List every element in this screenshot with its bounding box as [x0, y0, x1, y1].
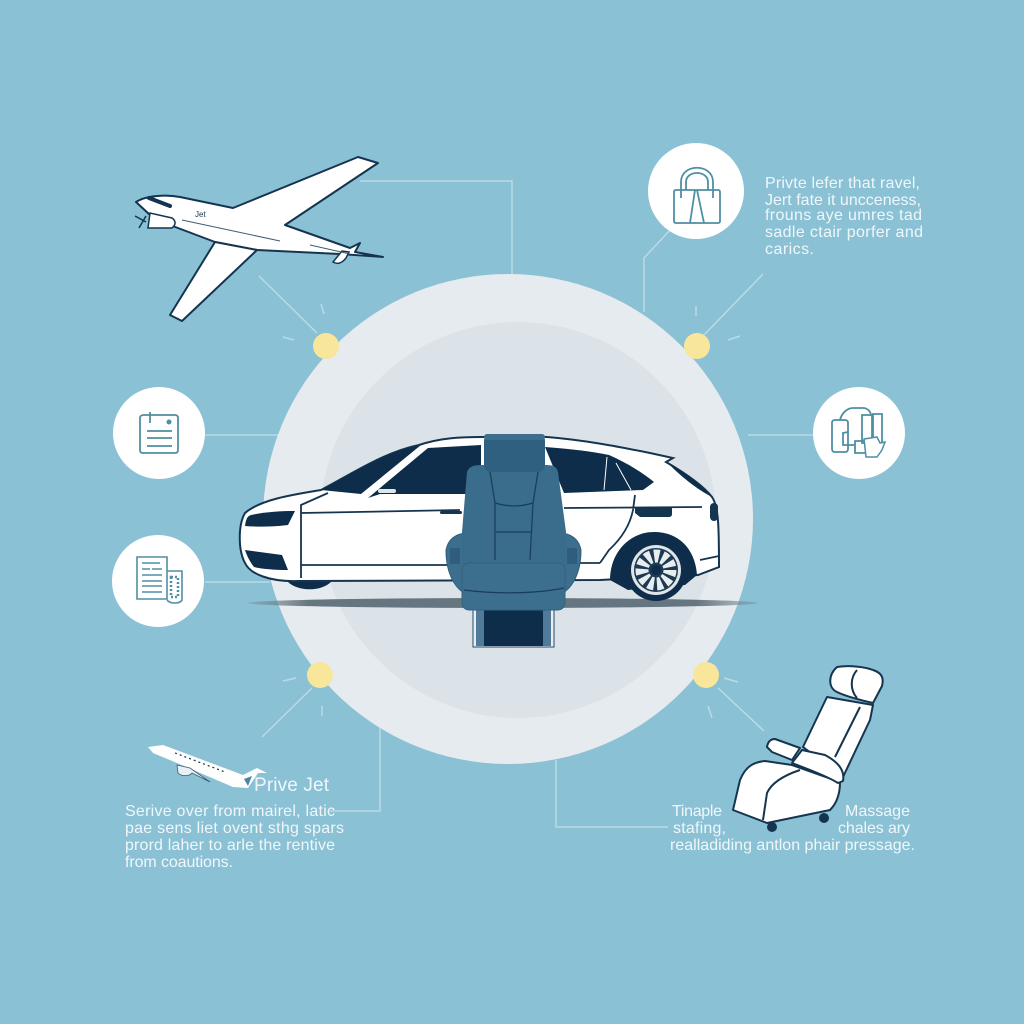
connector lines	[205, 181, 815, 827]
yellow dots	[307, 333, 719, 688]
text block: bottom right: Massage	[845, 803, 910, 820]
text block: bottom right	[670, 803, 915, 854]
text block: bottom right: Tinaple	[672, 803, 722, 820]
text block: top right: Jert fate it uncceness,	[765, 192, 921, 209]
icon: seat	[446, 434, 581, 647]
text block: bottom right: stafing,	[673, 820, 726, 837]
text block: bottom left: from coautions.	[125, 854, 233, 871]
text block: top right: carics.	[765, 241, 814, 258]
text block: top right: frouns aye umres tad	[765, 207, 922, 224]
icon: large jet: Jet	[195, 210, 206, 219]
text block: top right: sadle ctair porfer and	[765, 224, 923, 241]
text block: bottom left: pae sens liet ovent sthg spars	[125, 820, 344, 837]
text block: bottom left: Serive over from mairel, latic	[125, 803, 335, 820]
icon circle: note	[113, 387, 205, 479]
icon: car	[240, 437, 719, 590]
icon circle: document	[112, 535, 204, 627]
icon: small jet	[148, 745, 267, 788]
text block: bottom right: realladiding antlon phair pressage.	[670, 837, 915, 854]
text block: bottom right: chales ary	[838, 820, 910, 837]
text block: bottom left: prord laher to arle the rentive	[125, 837, 335, 854]
icon circle: bag	[648, 143, 744, 239]
icon circle: hand	[813, 387, 905, 479]
central circle	[263, 274, 753, 764]
text block: bottom left	[125, 803, 344, 871]
icon: large jet	[135, 157, 383, 321]
icon: recliner chair	[733, 666, 883, 831]
heading: private jet: Prive Jet	[254, 775, 330, 796]
text block: top right: Privte lefer that ravel,	[765, 175, 920, 192]
ground shadow	[248, 598, 758, 608]
text block: top right	[765, 175, 923, 258]
icon: wheel	[625, 539, 687, 601]
